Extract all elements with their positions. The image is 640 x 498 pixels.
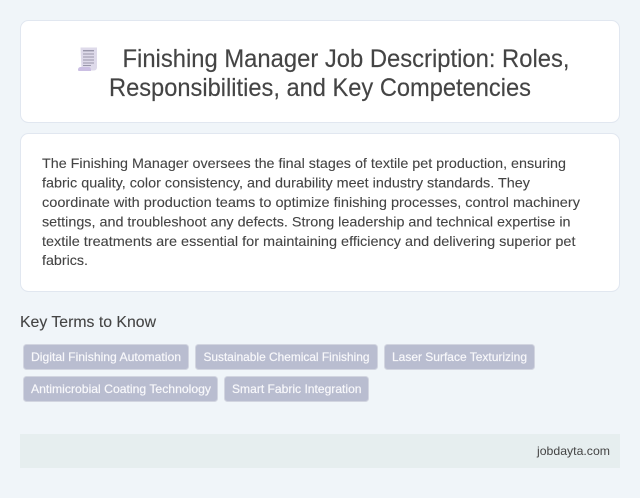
panel: description card: [20, 134, 620, 292]
tag: sustainable chemical finishing: [196, 344, 378, 370]
tag: laser surface texturizing: [384, 344, 534, 370]
description text: fabrics.: [42, 252, 88, 268]
tag: antimicrobial coating technology: Antimicrobial Coating Technology: [31, 382, 211, 396]
tag: sustainable chemical finishing: Sustainable Chemical Finishing: [204, 350, 370, 364]
tag: smart fabric integration: [224, 376, 368, 402]
tag: digital finishing automation: Digital Finishing Automation: [31, 350, 181, 364]
description text: fabric quality, color consistency, and durability meet industry standards. They: [42, 174, 530, 190]
title: Responsibilities, and Key Competencies: [109, 74, 531, 102]
tag: laser surface texturizing: Laser Surface Texturizing: [392, 350, 527, 364]
icon: document scroll: [78, 48, 97, 71]
title: [109, 45, 570, 102]
tag: smart fabric integration: Smart Fabric Integration: [232, 382, 362, 396]
panel: title card: [20, 20, 620, 122]
key term tags: [24, 344, 534, 402]
footer bar: jobdayta.com: [536, 444, 610, 458]
description text: The Finishing Manager oversees the final stages of textile pet production, ensuring: [42, 155, 566, 171]
heading: key terms: Key Terms to Know: [20, 314, 156, 331]
description text: textile treatments are essential for maintaining efficiency and delivering superior pet: [42, 233, 576, 249]
tag: digital finishing automation: [24, 344, 188, 370]
tag: antimicrobial coating technology: [24, 376, 218, 402]
description text: settings, and troubleshoot any defects. Strong leadership and technical expertise in: [42, 214, 570, 230]
description text: [42, 155, 580, 268]
description text: coordinate with production teams to optimize finishing processes, control machinery: [42, 194, 580, 210]
footer bar: [20, 434, 620, 468]
title: Finishing Manager Job Description: Roles,: [122, 45, 570, 73]
